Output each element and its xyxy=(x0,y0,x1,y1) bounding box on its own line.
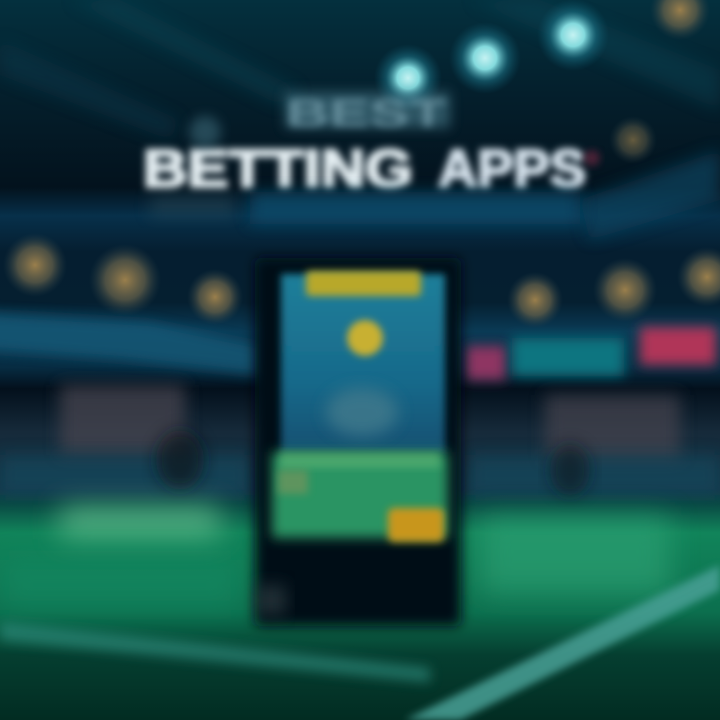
stadium floodlights xyxy=(374,0,710,164)
orange action button xyxy=(388,508,444,542)
title: blurred heading: APPS xyxy=(438,139,586,199)
left stand banner xyxy=(0,312,260,375)
title: blurred heading: BETTING xyxy=(143,139,413,199)
green pitch panel xyxy=(272,452,448,538)
lower phone controls xyxy=(256,585,286,615)
title: blurred heading xyxy=(143,92,600,224)
phone with betting app xyxy=(255,258,461,626)
phone body xyxy=(255,258,461,626)
title: blurred heading: BEST xyxy=(286,93,446,135)
stand lights right xyxy=(507,247,720,328)
phone screen xyxy=(281,274,445,454)
screen shadow figure xyxy=(326,388,398,436)
yellow coin icon xyxy=(347,320,383,356)
yellow header bar xyxy=(306,271,421,296)
right stand banners xyxy=(466,327,716,380)
stand lights left xyxy=(3,233,243,325)
football pitch xyxy=(0,505,720,720)
crowd xyxy=(0,385,720,496)
